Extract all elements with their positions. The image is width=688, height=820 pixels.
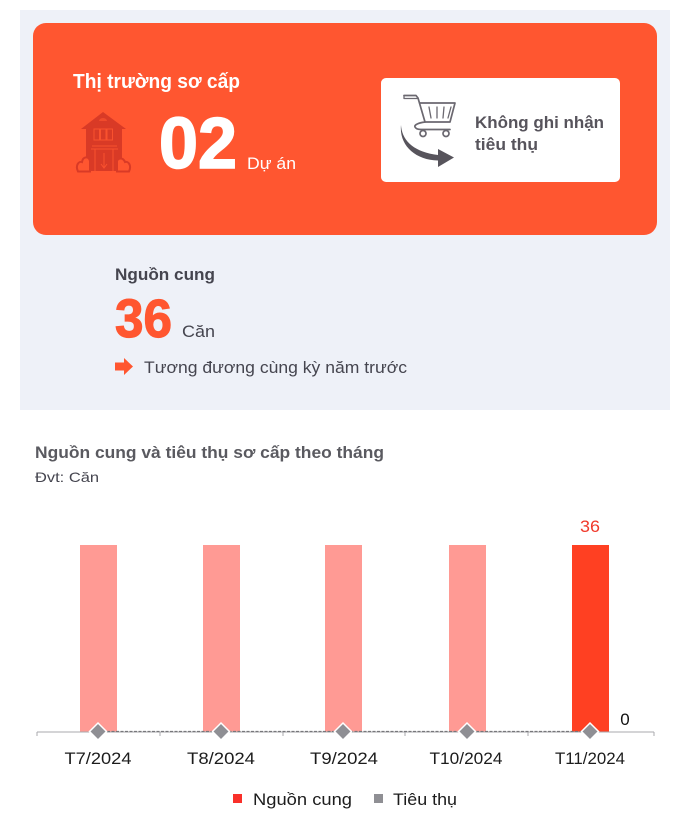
legend: Tiêu thụ: [393, 790, 457, 809]
value label: sales 0: 0: [620, 710, 630, 729]
axis labels: T7/2024: [64, 749, 132, 768]
line: sales at zero: [98, 730, 590, 732]
icon: right arrow: [115, 358, 133, 375]
axis: [37, 732, 654, 736]
callout: no sales recorded: [381, 78, 620, 182]
markers: sales: [90, 723, 598, 740]
icon: cart with down arrow: [401, 96, 455, 167]
text: no sales recorded: tiêu thụ: [475, 136, 538, 154]
text: no sales recorded: Không ghi nhận: [475, 114, 604, 132]
text: no sales recorded: [475, 114, 604, 154]
panel: primary market card: [33, 23, 657, 235]
axis labels: T9/2024: [310, 749, 378, 768]
block: supply: [115, 265, 408, 377]
number: 36 units: 36: [115, 289, 172, 349]
axis labels: T8/2024: [187, 749, 255, 768]
value label: supply 36: 36: [580, 517, 600, 536]
bar chart: monthly supply and sales: [37, 517, 654, 768]
label: units: Căn: [182, 322, 215, 341]
panel: summary background: [20, 10, 670, 410]
axis labels: [64, 749, 625, 768]
chart heading: Nguồn cung và tiêu thụ sơ cấp theo tháng: [35, 443, 384, 462]
legend: [233, 790, 457, 809]
heading: supply: Nguồn cung: [115, 265, 215, 284]
number: 02 projects: 02: [159, 104, 237, 184]
legend: Nguồn cung: [253, 790, 352, 809]
axis labels: T11/2024: [555, 749, 625, 768]
chart unit: Đvt: Căn: [35, 469, 99, 485]
bars: supply: [80, 545, 609, 732]
axis labels: T10/2024: [430, 749, 502, 768]
label: projects unit: Dự án: [247, 154, 296, 173]
icon: house: [77, 112, 130, 172]
text: year on year comparison: Tương đương cùng kỳ năm trước: [144, 358, 408, 377]
heading: primary market: Thị trường sơ cấp: [73, 71, 240, 93]
